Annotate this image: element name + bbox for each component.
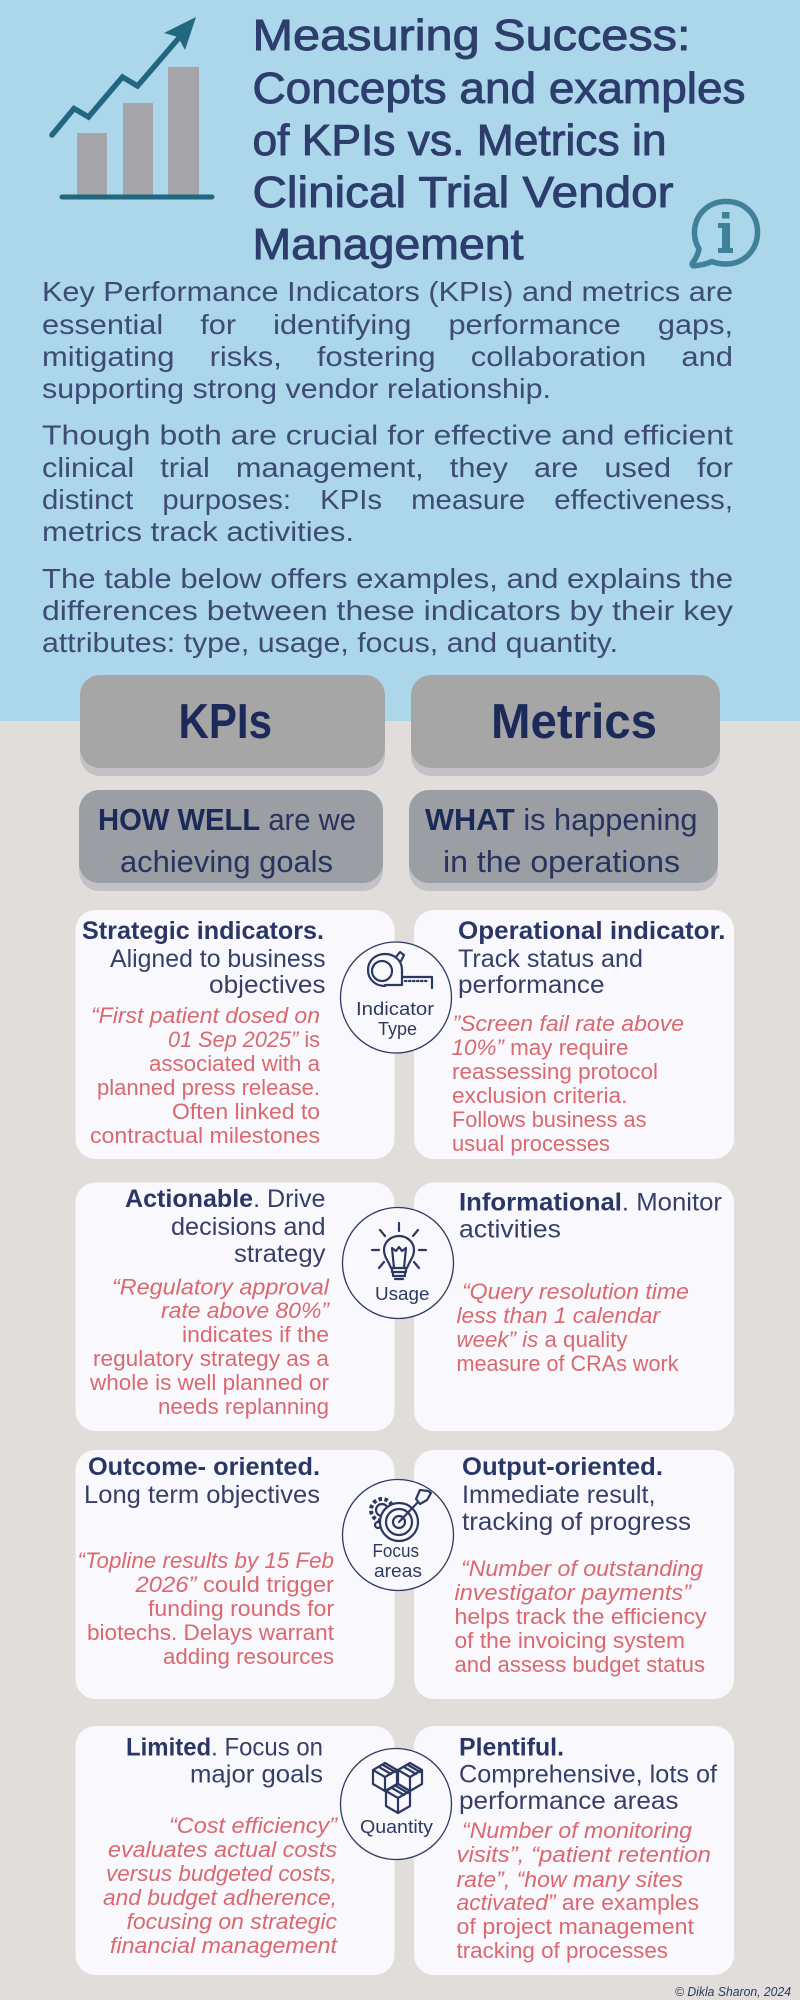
- panel: Metrics usage: Informational. Monitor: [459, 1188, 722, 1216]
- badge: indicator type: Indicator: [356, 999, 434, 1019]
- panel: Metrics focus areas: tracking of progress: [462, 1508, 691, 1536]
- icon: light bulb: [372, 1223, 426, 1279]
- panel: Metrics quantity: Plentiful.: [459, 1734, 564, 1762]
- text block: intro paragraph 1: [42, 276, 733, 404]
- badge: focus areas: areas: [374, 1561, 422, 1581]
- badge: indicator type: Type: [378, 1019, 417, 1039]
- text block: intro paragraph 1: supporting strong vendor relationship.: [42, 373, 551, 404]
- panel: KPI usage: rate above 80%”: [161, 1298, 331, 1323]
- subheader: KPIs how well: [79, 790, 383, 891]
- panel: KPI indicator type: [76, 910, 394, 1159]
- panel: Metrics indicator type: [414, 910, 734, 1159]
- column header: KPIs: KPIs: [178, 695, 272, 749]
- panel: KPI quantity: and budget adherence,: [103, 1885, 337, 1910]
- background: blue header band: [0, 0, 800, 721]
- footer credit: © Dikla Sharon, 2024: [675, 1984, 791, 1999]
- panel: KPI quantity: versus budgeted costs,: [106, 1861, 337, 1886]
- badge: usage: [342, 1208, 454, 1318]
- panel: Metrics quantity: visits”, “patient retention: [456, 1842, 711, 1867]
- text block: intro paragraph 3: attributes: type, usage, focus, and quantity.: [42, 627, 618, 658]
- title: Management: [252, 220, 524, 269]
- panel: Metrics usage: measure of CRAs work: [456, 1351, 679, 1376]
- panel: KPI quantity: “Cost efficiency”: [169, 1813, 339, 1838]
- panel: KPI focus areas: adding resources: [163, 1644, 334, 1669]
- title: Measuring Success:: [252, 11, 690, 60]
- panel: Metrics indicator type: reassessing protocol: [452, 1059, 658, 1084]
- panel: Metrics indicator type: 10%” may require: [452, 1035, 628, 1060]
- panel: Metrics focus areas: “Number of outstanding: [461, 1556, 703, 1581]
- panel: Metrics focus areas: [414, 1450, 734, 1699]
- icon: bar chart with rising arrow: [52, 17, 212, 197]
- panel: Metrics focus areas: investigator payments”: [454, 1580, 693, 1605]
- panel: Metrics quantity: Comprehensive, lots of: [459, 1760, 717, 1788]
- text block: intro paragraph 2: clinical trial management, they are used for: [42, 452, 733, 483]
- subheader: Metrics what: [409, 790, 718, 891]
- panel: KPI indicator type: associated with a: [149, 1051, 320, 1076]
- text block: intro paragraph 1: mitigating risks, fostering collaboration and: [42, 341, 733, 372]
- panel: Metrics focus areas: Immediate result,: [462, 1481, 656, 1509]
- text block: intro paragraph 1: essential for identifying performance gaps,: [42, 309, 733, 340]
- panel: KPI indicator type: Aligned to business: [110, 945, 326, 973]
- panel: Metrics usage: week” is a quality: [456, 1327, 628, 1352]
- panel: Metrics quantity: rate”, “how many sites: [456, 1867, 683, 1892]
- panel: KPI indicator type: contractual milestones: [90, 1123, 320, 1148]
- icon: target with gear and arrow: [371, 1490, 431, 1541]
- badge: focus areas: Focus: [372, 1541, 419, 1561]
- column header: Metrics: Metrics: [491, 695, 657, 749]
- panel: Metrics indicator type: Track status and: [458, 945, 643, 973]
- text block: intro paragraph 3: The table below offers examples, and explains the: [42, 563, 733, 594]
- text block: intro paragraph 2: metrics track activities.: [42, 516, 354, 547]
- panel: Metrics focus areas: and assess budget status: [454, 1652, 705, 1677]
- panel: KPI focus areas: biotechs. Delays warrant: [87, 1620, 335, 1645]
- panel: KPI usage: needs replanning: [158, 1394, 329, 1419]
- panel: KPI usage: Actionable. Drive: [125, 1185, 326, 1213]
- panel: KPI quantity: financial management: [110, 1933, 339, 1958]
- panel: KPI focus areas: 2026” could trigger: [134, 1572, 335, 1597]
- panel: KPI usage: decisions and: [171, 1213, 326, 1241]
- subheader: Metrics what: WHAT is happening: [425, 802, 698, 837]
- panel: Metrics quantity: activated” are examples: [456, 1890, 699, 1915]
- panel: Metrics indicator type: Follows business as: [452, 1107, 646, 1132]
- panel: KPI quantity: focusing on strategic: [126, 1909, 337, 1934]
- panel: KPI indicator type: “First patient dosed on: [91, 1003, 320, 1028]
- panel: Metrics quantity: of project management: [456, 1914, 695, 1939]
- panel: KPI focus areas: “Topline results by 15 Feb: [78, 1548, 334, 1573]
- panel: KPI indicator type: 01 Sep 2025” is: [168, 1027, 320, 1052]
- title: [252, 11, 746, 269]
- column header: Metrics: [411, 675, 720, 776]
- panel: KPI usage: strategy: [234, 1240, 326, 1268]
- panel: Metrics quantity: [414, 1726, 734, 1975]
- panel: Metrics quantity: tracking of processes: [456, 1938, 668, 1963]
- background: beige lower band: [0, 721, 800, 2000]
- panel: KPI usage: “Regulatory approval: [112, 1274, 330, 1300]
- panel: Metrics indicator type: ”Screen fail rate above: [452, 1011, 684, 1036]
- panel: Metrics indicator type: usual processes: [452, 1131, 610, 1156]
- text block: intro paragraph 3: differences between these indicators by their key: [42, 595, 733, 626]
- text block: intro paragraph 2: Though both are crucial for effective and efficient: [42, 420, 733, 450]
- panel: KPI quantity: Limited. Focus on: [126, 1734, 323, 1762]
- panel: Metrics indicator type: exclusion criteria.: [452, 1083, 628, 1108]
- panel: KPI quantity: major goals: [190, 1760, 323, 1788]
- panel: Metrics indicator type: performance: [458, 971, 604, 999]
- panel: KPI focus areas: funding rounds for: [148, 1596, 335, 1621]
- panel: Metrics usage: less than 1 calendar: [456, 1303, 662, 1328]
- title: Concepts and examples: [252, 64, 746, 113]
- panel: Metrics quantity: performance areas: [459, 1787, 678, 1815]
- subheader: Metrics what: in the operations: [443, 844, 680, 879]
- badge: focus areas: [342, 1480, 454, 1590]
- text block: intro paragraph 2: [42, 420, 733, 547]
- subheader: KPIs how well: HOW WELL are we: [98, 802, 356, 837]
- badge: indicator type: [340, 942, 452, 1053]
- column header: KPIs: [80, 675, 385, 776]
- badge: usage: Usage: [375, 1284, 430, 1304]
- panel: KPI indicator type: planned press release.: [97, 1075, 320, 1100]
- panel: KPI usage: indicates if the: [182, 1322, 329, 1347]
- panel: KPI quantity: [76, 1726, 394, 1975]
- icon: stacked boxes: [373, 1763, 422, 1813]
- panel: KPI usage: [76, 1182, 394, 1431]
- badge: quantity: [340, 1748, 452, 1860]
- panel: KPI indicator type: Often linked to: [172, 1099, 320, 1124]
- panel: KPI focus areas: [76, 1450, 394, 1699]
- panel: Metrics indicator type: Operational indicator.: [458, 917, 726, 945]
- panel: Metrics focus areas: Output-oriented.: [462, 1453, 663, 1481]
- text block: intro paragraph 1: Key Performance Indicators (KPIs) and metrics are: [42, 276, 733, 307]
- panel: KPI quantity: evaluates actual costs: [108, 1837, 337, 1862]
- panel: Metrics usage: activities: [459, 1216, 561, 1244]
- panel: Metrics quantity: “Number of monitoring: [462, 1818, 692, 1843]
- panel: KPI focus areas: Outcome- oriented.: [88, 1453, 320, 1481]
- badge: quantity: Quantity: [360, 1817, 433, 1837]
- panel: KPI indicator type: objectives: [209, 971, 326, 999]
- text block: intro paragraph 3: [42, 563, 733, 658]
- icon: info speech bubble: [692, 202, 758, 266]
- panel: KPI usage: regulatory strategy as a: [93, 1346, 329, 1371]
- icon: measuring tape: [368, 952, 432, 988]
- subheader: KPIs how well: achieving goals: [120, 844, 333, 879]
- panel: KPI indicator type: Strategic indicators.: [82, 917, 324, 945]
- panel: KPI usage: whole is well planned or: [89, 1370, 330, 1395]
- panel: Metrics focus areas: of the invoicing system: [454, 1628, 685, 1653]
- panel: Metrics usage: [414, 1182, 734, 1431]
- title: Clinical Trial Vendor: [252, 168, 674, 217]
- title: of KPIs vs. Metrics in: [252, 116, 666, 165]
- panel: Metrics usage: “Query resolution time: [462, 1279, 689, 1304]
- panel: Metrics focus areas: helps track the efficiency: [454, 1604, 707, 1629]
- panel: KPI focus areas: Long term objectives: [84, 1481, 320, 1509]
- text block: intro paragraph 2: distinct purposes: KPIs measure effectiveness,: [42, 484, 733, 515]
